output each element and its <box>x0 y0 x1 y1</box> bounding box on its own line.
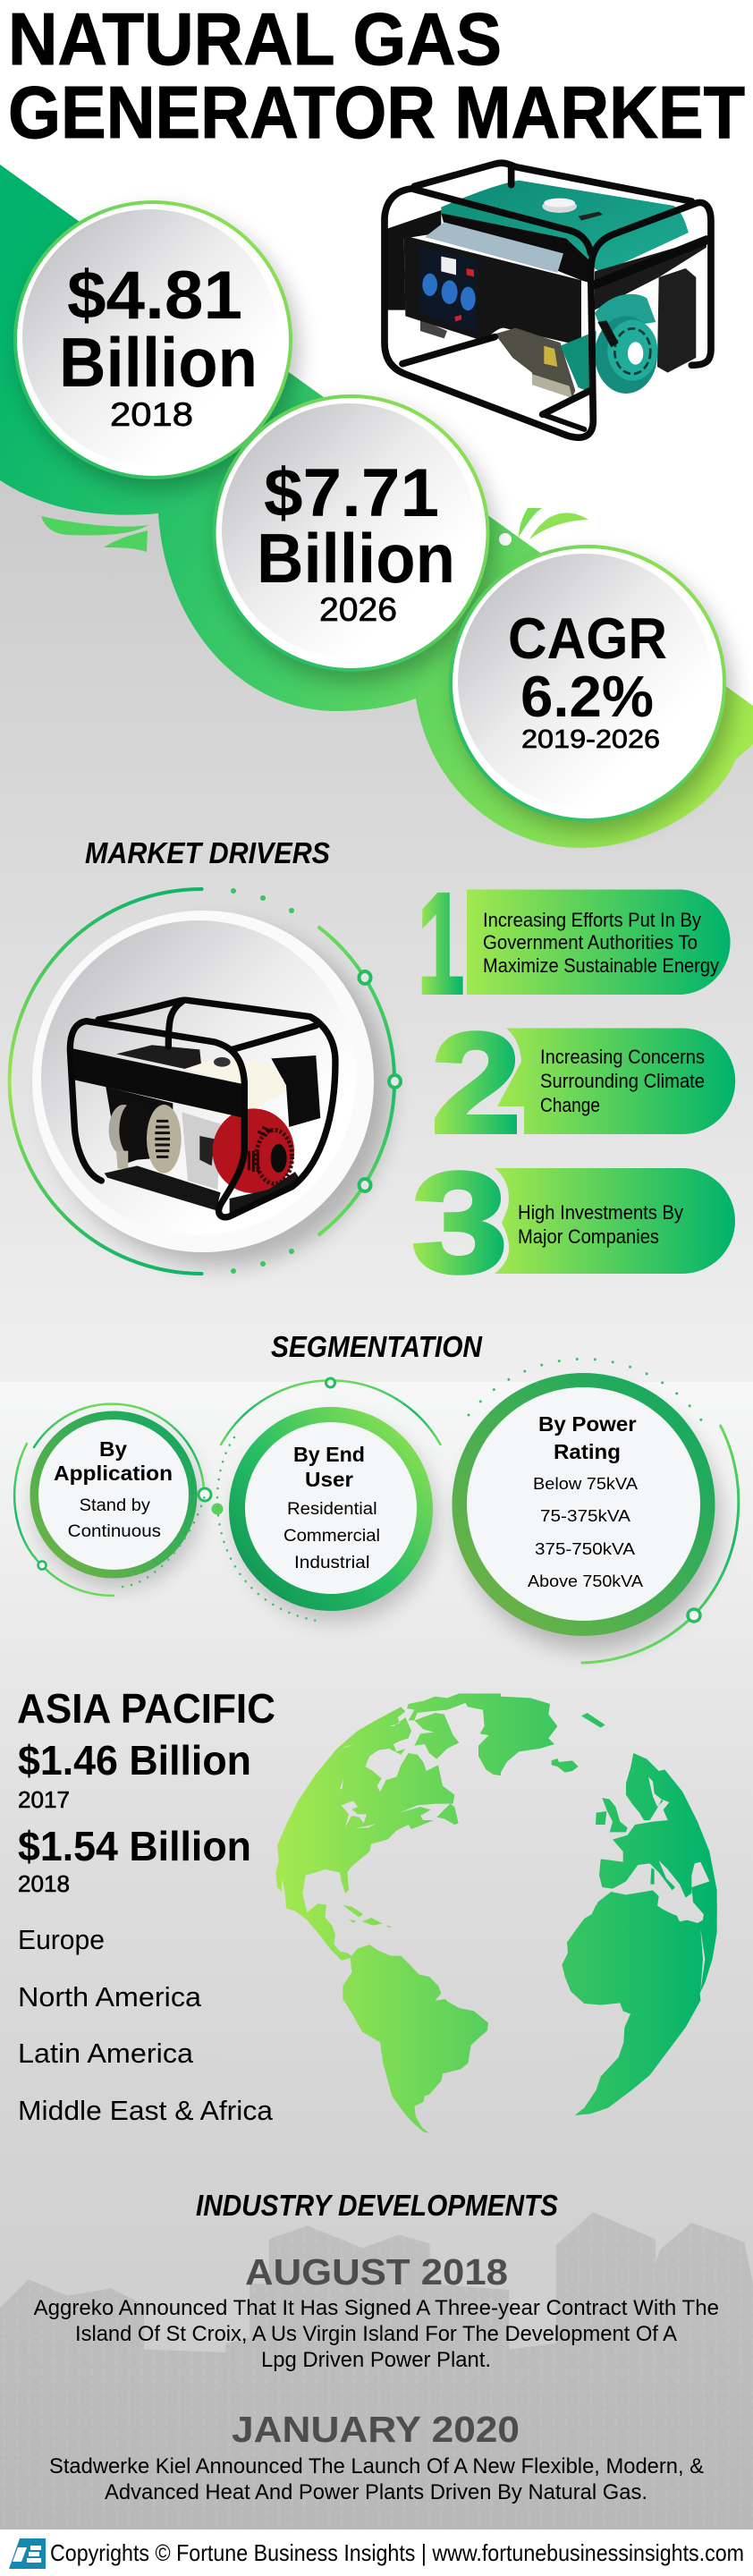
numeral 1: 1 <box>418 863 464 1023</box>
icon: red generator <box>70 1000 335 1217</box>
regional text block: North America <box>18 1981 202 2012</box>
segment arcs <box>14 1404 204 1596</box>
decorative leaves <box>41 508 588 552</box>
development: january 2020: JANUARY 2020 <box>232 2409 520 2450</box>
node <box>326 1378 334 1387</box>
labels: Commercial <box>283 1527 380 1546</box>
regional text block <box>17 1685 275 2126</box>
development: august 2018 <box>34 2251 719 2372</box>
driver 3 text: Major Companies <box>518 1225 659 1248</box>
icon: teal generator <box>385 163 711 437</box>
city skyline backdrop <box>0 2212 753 2529</box>
development: january 2020: Stadwerke Kiel Announced The Launch Of A New Flexible, Modern, & <box>49 2454 704 2479</box>
driver 2 text: Surrounding Climate <box>540 1070 705 1092</box>
stat circle: 2018 value: Billion <box>59 323 258 402</box>
stat circle: CAGR: 6.2% <box>520 664 654 729</box>
right arc <box>582 1426 739 1663</box>
footer logo <box>9 2538 46 2569</box>
labels: By End <box>293 1443 365 1466</box>
labels: Application <box>54 1462 173 1485</box>
globe map <box>275 1693 717 2133</box>
driver 3 <box>411 1142 735 1302</box>
development: august 2018: Lpg Driven Power Plant. <box>261 2348 491 2372</box>
footer bar <box>0 2529 753 2576</box>
driver 2 text <box>540 1046 705 1116</box>
regional text block: $1.54 Billion <box>18 1823 251 1869</box>
labels: Residential <box>287 1500 377 1519</box>
segment: by end user <box>217 1378 440 1621</box>
labels <box>54 1437 173 1541</box>
regional text block: Europe <box>18 1924 105 1955</box>
driver 2 text: Increasing Concerns <box>540 1046 705 1068</box>
numeral 2: 2 <box>431 1003 521 1163</box>
arc: right <box>319 928 394 1234</box>
stat circle: 2026 value: 2026 <box>319 591 397 628</box>
title <box>8 0 745 154</box>
development: january 2020 <box>49 2409 704 2504</box>
driver 3 text: High Investments By <box>518 1201 683 1224</box>
driver 1 text: Maximize Sustainable Energy <box>483 954 719 977</box>
driver 3 pill <box>495 1168 735 1274</box>
stat circle: CAGR: CAGR <box>508 606 667 671</box>
heading: industry developments: INDUSTRY DEVELOPMENTS <box>196 2189 558 2222</box>
nodes <box>199 1488 211 1501</box>
stat circle: CAGR: 2019-2026 <box>521 725 660 754</box>
dotted arc <box>123 1496 205 1587</box>
regional text block: ASIA PACIFIC <box>17 1685 275 1732</box>
regional text block: Latin America <box>18 2038 194 2069</box>
caribbean, south america, africa <box>343 1904 717 2133</box>
green diagonal band <box>0 165 753 848</box>
regional text block: Middle East & Africa <box>18 2095 274 2126</box>
top arc <box>221 1380 440 1445</box>
market drivers image circle <box>10 888 401 1274</box>
labels: Stand by <box>80 1496 151 1515</box>
page background: upper gradient <box>0 0 753 1382</box>
connector dot <box>211 1503 224 1515</box>
stat circle: 2026 value: $7.71 <box>264 455 439 531</box>
dotted arc <box>217 1437 317 1621</box>
labels: Rating <box>554 1440 621 1463</box>
stat circle: 2018 value <box>13 200 299 490</box>
labels: 75-375kVA <box>540 1506 631 1525</box>
regional text block: $1.46 Billion <box>18 1737 251 1784</box>
development: august 2018: AUGUST 2018 <box>245 2251 508 2292</box>
white top area <box>0 0 753 707</box>
regional text block: 2017 <box>18 1786 70 1813</box>
stat circle: 2026 value: Billion <box>257 519 455 597</box>
driver 1 <box>418 863 731 1023</box>
development: january 2020: Advanced Heat And Power Plants Driven By Natural Gas. <box>105 2480 647 2504</box>
dotted arc <box>469 1359 708 1431</box>
labels: User <box>305 1468 353 1491</box>
driver 1 text <box>483 909 719 977</box>
north america and greenland west <box>275 1693 501 1961</box>
numeral 3: 3 <box>411 1142 508 1302</box>
driver 1 text: Increasing Efforts Put In By <box>483 909 701 931</box>
segment: by power rating <box>453 1359 739 1663</box>
segment: by application <box>14 1404 224 1596</box>
labels: Industrial <box>294 1554 370 1572</box>
stat circle: 2018 value: 2018 <box>110 396 193 433</box>
stat circle: 2026 value <box>213 394 495 682</box>
labels <box>528 1412 644 1590</box>
heading: segmentation: SEGMENTATION <box>271 1330 483 1363</box>
stat circle: 2018 value: $4.81 <box>67 258 242 334</box>
page background: lower gradient <box>0 1382 753 2576</box>
stat circle: CAGR <box>449 545 732 833</box>
driver 3 text <box>518 1201 683 1248</box>
development: august 2018: Aggreko Announced That It Has Signed A Three-year Contract With The <box>34 2296 719 2320</box>
arc: left <box>10 889 202 1274</box>
greenland east, iceland, europe <box>500 1697 717 1915</box>
labels <box>283 1443 380 1572</box>
nodes and dots <box>231 888 401 1274</box>
labels: Above 750kVA <box>528 1572 644 1590</box>
development: august 2018: Island Of St Croix, A Us Virgin Island For The Development Of A <box>75 2322 677 2346</box>
heading: market drivers: MARKET DRIVERS <box>85 836 330 869</box>
labels: By Power <box>538 1412 637 1436</box>
labels: 375-750kVA <box>535 1539 636 1558</box>
labels: Continuous <box>68 1522 161 1541</box>
driver 2 pill <box>497 1029 735 1134</box>
regional text block: 2018 <box>18 1870 70 1897</box>
driver 2 text: Change <box>540 1094 600 1116</box>
driver 1 text: Government Authorities To <box>483 931 698 953</box>
node <box>688 1609 700 1622</box>
labels: By <box>99 1437 127 1461</box>
driver 1 pill <box>467 889 731 995</box>
white dot <box>499 533 512 546</box>
labels: Below 75kVA <box>533 1474 639 1493</box>
driver 2 <box>431 1003 735 1163</box>
